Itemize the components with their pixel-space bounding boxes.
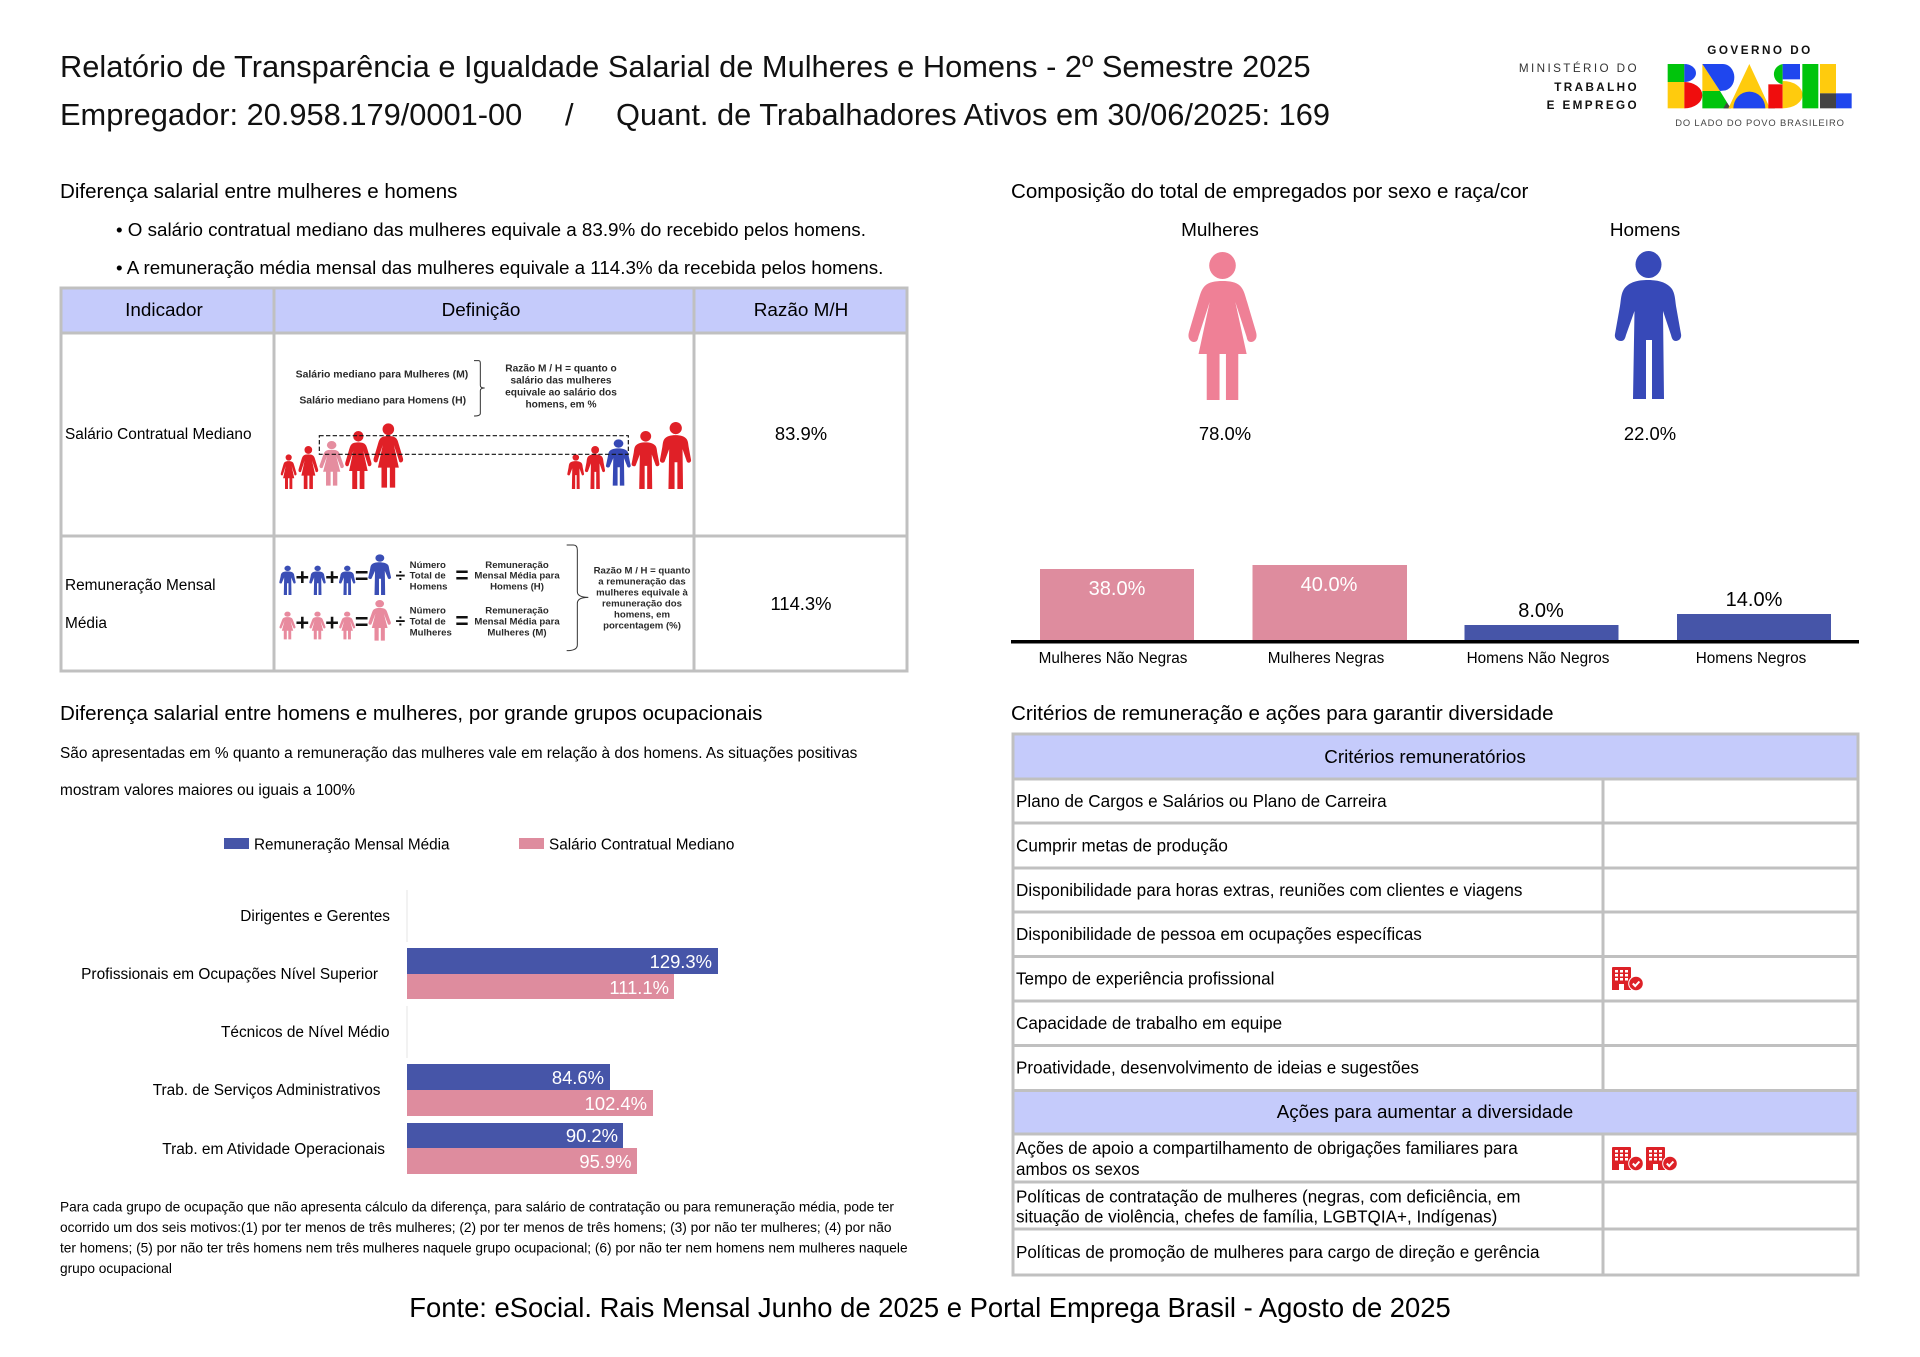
- table: indicadores: Remuneração Mensal: [65, 577, 216, 594]
- diagram: remuneração média: mulheres equivale à: [596, 588, 689, 599]
- bar chart: grupos ocupacionais: 95.9%: [579, 1151, 632, 1172]
- diagram: remuneração média: ÷: [396, 611, 406, 631]
- logo: Ministério do Trabalho e Emprego: E EMPREGO: [1547, 99, 1639, 112]
- table: critérios remuneratórios e ações: [1013, 734, 1858, 1275]
- diagram: remuneração média: Mulheres: [410, 627, 452, 638]
- bar chart: sexo e raça: Mulheres Negras: [1268, 650, 1385, 667]
- diagram: remuneração média: homens, em: [614, 610, 670, 621]
- table: critérios remuneratórios e ações: Políticas de promoção de mulheres para cargo de direção e gerência: [1016, 1243, 1540, 1262]
- bar chart: grupos ocupacionais: Trab. em Atividade Operacionais: [162, 1141, 385, 1158]
- table: critérios remuneratórios e ações: Políticas de contratação de mulheres (negras, com deficiência, em: [1016, 1188, 1521, 1206]
- text: bullet salário contratual: • O salário contratual mediano das mulheres equivale a 83.9% do recebido pelos homens.: [116, 219, 866, 240]
- diagram: remuneração média: a remuneração das: [598, 577, 686, 588]
- legend: Remuneração Mensal Média: [254, 836, 450, 854]
- bar chart: grupos ocupacionais: Técnicos de Nível Médio: [221, 1024, 390, 1041]
- diagram: remuneração média: +: [325, 564, 339, 590]
- bar chart: sexo e raça: Homens Não Negros: [1467, 650, 1610, 667]
- logo: Ministério do Trabalho e Emprego: TRABALHO: [1554, 81, 1639, 94]
- bar chart: sexo e raça: 38.0%: [1089, 578, 1146, 600]
- bar chart: grupos ocupacionais: Profissionais em Ocupações Nível Superior: [81, 966, 378, 983]
- table: indicadores: Indicador: [125, 300, 203, 321]
- table: critérios remuneratórios e ações: Critérios remuneratórios: [1324, 746, 1526, 767]
- diagram: remuneração média: Número: [410, 606, 446, 617]
- bar chart: sexo e raça: [1011, 565, 1859, 667]
- logo: Governo do Brasil: GOVERNO DO: [1707, 44, 1813, 57]
- bar chart: sexo e raça: Mulheres Não Negras: [1039, 650, 1188, 667]
- text: nota de rodapé: ocorrido um dos seis motivos:(1) por ter menos de três mulheres; (2) por ter menos de três homens; (3) por não ter mulheres; (4) por não: [60, 1220, 892, 1235]
- diagram: remuneração média: Remuneração: [485, 560, 549, 571]
- table: critérios remuneratórios e ações: Ações de apoio a compartilhamento de obrigações familiares para: [1016, 1139, 1518, 1158]
- title: Quant. de Trabalhadores Ativos em 30/06/2025: 169: [616, 97, 1330, 132]
- diagram: remuneração média: =: [455, 562, 469, 588]
- bar chart: grupos ocupacionais: Trab. de Serviços Administrativos: [153, 1082, 381, 1099]
- bar chart: sexo e raça: 8.0%: [1518, 600, 1564, 622]
- icon: empresa com selo: [1612, 1147, 1644, 1171]
- diagram: remuneração média: ÷: [396, 565, 406, 585]
- text: nota de rodapé: Para cada grupo de ocupação que não apresenta cálculo da diferença, para salário de contratação ou para remuneração média, pode ter: [60, 1200, 894, 1214]
- text: explicação: mostram valores maiores ou iguais a 100%: [60, 782, 355, 799]
- table: indicadores: Razão M/H: [754, 300, 848, 321]
- heading: composição: Composição do total de empregados por sexo e raça/cor: [1011, 180, 1529, 203]
- pictogram: mulheres: Mulheres: [1181, 220, 1259, 241]
- diagram: remuneração média: =: [355, 563, 368, 589]
- diagram: remuneração média: Homens (H): [490, 582, 544, 593]
- panel: composição: [1011, 180, 1859, 667]
- table: critérios remuneratórios e ações: Capacidade de trabalho em equipe: [1016, 1014, 1282, 1033]
- table: indicadores: [61, 288, 907, 671]
- text: nota de rodapé: ter homens; (5) por não ter três homens nem três mulheres naquele grupo ocupacional; (6) por não ter nem homens nem mulheres naquele: [60, 1240, 908, 1256]
- diagram: remuneração média: porcentagem (%): [603, 621, 681, 632]
- text: bullet remuneração média: • A remuneração média mensal das mulheres equivale a 114.3% da recebida pelos homens.: [116, 257, 883, 278]
- legend: Salário Contratual Mediano: [549, 836, 734, 854]
- table: critérios remuneratórios e ações: Tempo de experiência profissional: [1016, 970, 1274, 988]
- diagram: remuneração média: +: [296, 609, 309, 635]
- pictogram: mulheres: [1181, 220, 1259, 444]
- bar chart: grupos ocupacionais: 129.3%: [650, 951, 712, 972]
- panel: grandes grupos ocupacionais: [60, 702, 908, 1276]
- diagram: remuneração média: Total de: [410, 571, 446, 582]
- table: critérios remuneratórios e ações: Plano de Cargos e Salários ou Plano de Carreira: [1016, 792, 1387, 811]
- diagram: salário mediano: Salário mediano para Mulheres (M): [296, 370, 468, 381]
- diagram: remuneração média: +: [325, 609, 339, 635]
- diagram: remuneração média: Razão M / H = quanto: [594, 566, 691, 577]
- table: indicadores: 114.3%: [770, 593, 832, 614]
- diagram: remuneração média: Mensal Média para: [474, 571, 560, 582]
- diagram: remuneração média: Mulheres (M): [487, 627, 547, 638]
- diagram: salário mediano: salário das mulheres: [510, 375, 612, 386]
- bar chart: grupos ocupacionais: 111.1%: [609, 977, 669, 998]
- diagram: remuneração média: =: [355, 608, 368, 634]
- pictogram: mulheres: 78.0%: [1199, 423, 1251, 444]
- pictogram: homens: 22.0%: [1624, 423, 1676, 444]
- bar chart: grupos ocupacionais: 102.4%: [585, 1093, 647, 1114]
- diagram: salário mediano: homens, em %: [525, 399, 597, 410]
- table: critérios remuneratórios e ações: Disponibilidade de pessoa em ocupações específicas: [1016, 925, 1422, 944]
- title: Empregador: 20.958.179/0001-00: [60, 97, 522, 132]
- text: nota de rodapé: grupo ocupacional: [60, 1261, 172, 1276]
- table: critérios remuneratórios e ações: Proatividade, desenvolvimento de ideias e sugestões: [1016, 1058, 1419, 1078]
- table: critérios remuneratórios e ações: Cumprir metas de produção: [1016, 836, 1228, 856]
- diagram: remuneração média: Remuneração: [485, 606, 549, 617]
- diagram: remuneração média: [279, 544, 691, 652]
- diagram: salário mediano: [280, 360, 692, 489]
- bar chart: sexo e raça: 14.0%: [1726, 589, 1783, 611]
- logo: Governo do Brasil: DO LADO DO POVO BRASILEIRO: [1675, 117, 1845, 128]
- bar chart: grupos ocupacionais: 90.2%: [566, 1125, 618, 1146]
- logo: Ministério do Trabalho e Emprego: [1519, 62, 1639, 112]
- title: Relatório de Transparência e Igualdade Salarial de Mulheres e Homens - 2º Semestre 2025: [60, 49, 1311, 84]
- diagram: remuneração média: remuneração dos: [602, 599, 682, 610]
- table: critérios remuneratórios e ações: situação de violência, chefes de família, LGBTQIA+, Indígenas): [1016, 1208, 1497, 1226]
- table: critérios remuneratórios e ações: Disponibilidade para horas extras, reuniões com clientes e viagens: [1016, 881, 1522, 900]
- logo: Ministério do Trabalho e Emprego: MINISTÉRIO DO: [1519, 62, 1639, 75]
- panel: critérios de remuneração: [1011, 702, 1858, 1275]
- diagram: remuneração média: Homens: [410, 582, 448, 593]
- pictogram: homens: Homens: [1610, 220, 1680, 241]
- icon: empresa com selo: [1612, 967, 1644, 991]
- bar chart: sexo e raça: 40.0%: [1301, 574, 1358, 596]
- footer: fonte: Fonte: eSocial. Rais Mensal Junho de 2025 e Portal Emprega Brasil - Agosto de 2025: [409, 1292, 1451, 1323]
- diagram: remuneração média: +: [296, 564, 309, 590]
- diagram: salário mediano: equivale ao salário dos: [505, 388, 617, 399]
- diagram: remuneração média: =: [455, 608, 469, 634]
- text: explicação: [60, 745, 858, 799]
- heading: diferença salarial: Diferença salarial entre mulheres e homens: [60, 180, 457, 203]
- table: indicadores: Salário Contratual Mediano: [65, 426, 252, 443]
- table: indicadores: Definição: [442, 300, 520, 321]
- diagram: remuneração média: Mensal Média para: [474, 617, 560, 628]
- heading: grupos ocupacionais: Diferença salarial entre homens e mulheres, por grande grupos ocupacionais: [60, 702, 762, 725]
- table: indicadores: 83.9%: [775, 423, 827, 444]
- text: explicação: São apresentadas em % quanto a remuneração das mulheres vale em relação à dos homens. As situações positivas: [60, 745, 858, 762]
- diagram: remuneração média: Número: [410, 560, 446, 571]
- bar chart: grupos ocupacionais: Dirigentes e Gerentes: [240, 908, 390, 925]
- bar chart: sexo e raça: Homens Negros: [1696, 650, 1807, 667]
- panel: diferença salarial: [60, 180, 907, 671]
- text: nota de rodapé: [60, 1200, 908, 1276]
- icon: empresa com selo: [1646, 1147, 1678, 1171]
- table: critérios remuneratórios e ações: Ações para aumentar a diversidade: [1277, 1101, 1573, 1122]
- title: [60, 49, 1330, 132]
- bar chart: grupos ocupacionais: 84.6%: [552, 1067, 604, 1088]
- pictogram: homens: [1610, 220, 1681, 444]
- heading: critérios: Critérios de remuneração e ações para garantir diversidade: [1011, 702, 1554, 725]
- legend: [224, 836, 734, 854]
- diagram: remuneração média: Total de: [410, 617, 446, 628]
- diagram: salário mediano: Salário mediano para Homens (H): [299, 395, 466, 406]
- title: /: [565, 97, 574, 132]
- bar chart: grupos ocupacionais: [81, 890, 718, 1174]
- table: critérios remuneratórios e ações: ambos os sexos: [1016, 1160, 1140, 1179]
- logo: Governo do Brasil: [1668, 44, 1852, 128]
- table: indicadores: Média: [65, 615, 107, 632]
- diagram: salário mediano: Razão M / H = quanto o: [505, 363, 617, 374]
